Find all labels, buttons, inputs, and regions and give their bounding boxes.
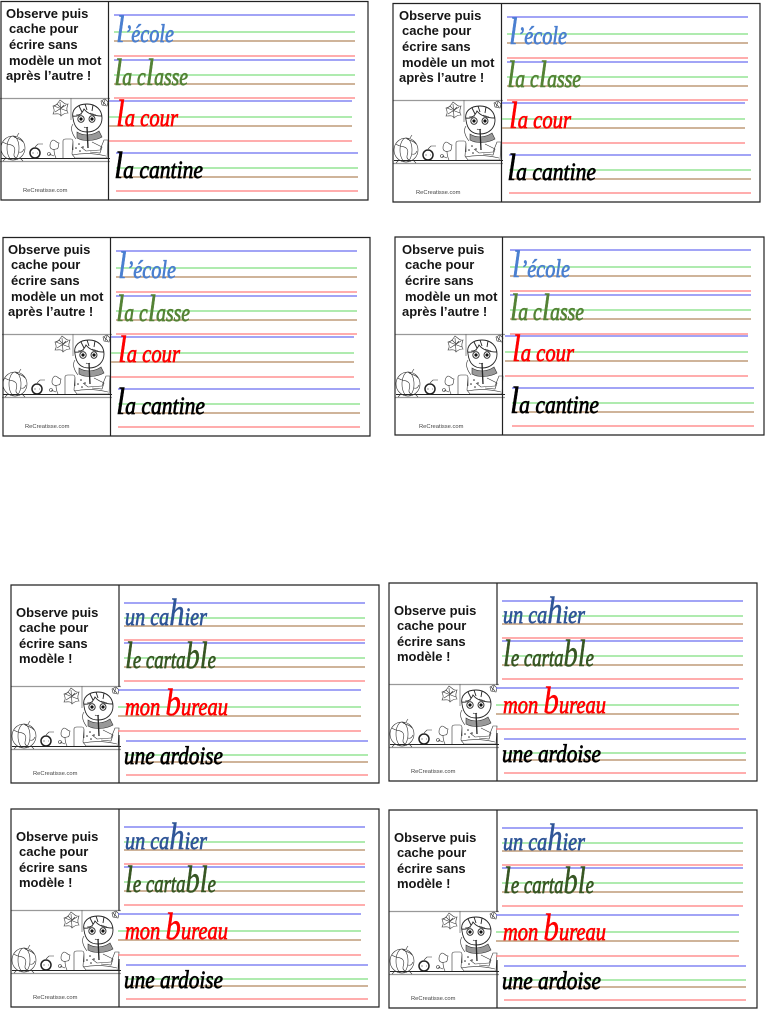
cursive words: un cahier [503, 817, 585, 859]
cursive words: mon bureau [503, 907, 606, 949]
cursive words [507, 11, 596, 189]
writing lines [109, 15, 358, 191]
cursive words: l’école [509, 11, 567, 53]
cursive words: la cantine [510, 380, 599, 422]
illustration: girl at desk [11, 686, 121, 750]
cursive words: la classe [510, 287, 584, 329]
card 6: un cahier [389, 583, 757, 781]
cursive words: la classe [116, 288, 190, 330]
cursive words: la cour [118, 329, 180, 371]
instructions: après l’autre ! [399, 70, 484, 85]
website credit: ReCreatisse.com [23, 188, 68, 194]
instructions: écrire sans [11, 273, 80, 288]
cursive words [124, 816, 228, 994]
card frame [11, 809, 379, 1007]
cursive words: la cantine [114, 145, 203, 187]
cursive words: la classe [114, 52, 188, 94]
card 5: un cahier [11, 585, 379, 783]
card 4: l'école [395, 237, 764, 435]
instructions: modèle un mot [402, 55, 495, 70]
cursive words: le cartable [503, 860, 594, 902]
card 8: un cahier [389, 810, 757, 1008]
card frame [1, 2, 368, 200]
instructions: écrire sans [397, 861, 466, 876]
instructions: après l’autre ! [6, 68, 91, 83]
card frame [395, 237, 764, 435]
cursive words: un cahier [125, 816, 207, 858]
card 2: l'école [393, 4, 760, 202]
cursive words: le cartable [503, 633, 594, 675]
cursive words: la cour [116, 93, 178, 135]
cursive words: une ardoise [124, 743, 223, 770]
writing lines [111, 251, 360, 427]
instructions: cache pour [397, 845, 466, 860]
card frame [389, 583, 757, 781]
instructions [394, 603, 476, 664]
cursive words: mon bureau [125, 906, 228, 948]
instructions [16, 829, 98, 890]
cursive words: un cahier [503, 590, 585, 632]
instructions: cache pour [19, 620, 88, 635]
cursive words: la cantine [507, 147, 596, 189]
cursive words: l’école [116, 9, 174, 51]
card frame [11, 585, 379, 783]
card 7: un cahier [11, 809, 379, 1007]
writing lines [502, 17, 751, 193]
cursive words: l’école [118, 245, 176, 287]
instructions: modèle ! [397, 649, 450, 664]
cursive words [502, 817, 606, 995]
cursive words: le cartable [125, 859, 216, 901]
website credit: ReCreatisse.com [419, 424, 464, 430]
card frame [389, 810, 757, 1008]
illustration: girl at desk [11, 910, 121, 974]
cursive words [502, 590, 606, 768]
illustration: girl at desk [2, 334, 112, 398]
writing lines [118, 827, 368, 999]
cursive words: une ardoise [502, 968, 601, 995]
website credit: ReCreatisse.com [33, 771, 78, 777]
instructions: modèle un mot [405, 289, 498, 304]
instructions: modèle ! [397, 876, 450, 891]
instructions: après l’autre ! [8, 304, 93, 319]
instructions: Observe puis [399, 8, 481, 23]
writing lines [118, 603, 368, 775]
instructions: Observe puis [394, 830, 476, 845]
website credit: ReCreatisse.com [411, 769, 456, 775]
instructions [6, 6, 102, 83]
instructions: Observe puis [394, 603, 476, 618]
instructions: cache pour [11, 257, 80, 272]
instructions: Observe puis [402, 242, 484, 257]
illustration: girl at desk [389, 684, 499, 748]
instructions: Observe puis [16, 605, 98, 620]
instructions: écrire sans [19, 636, 88, 651]
instructions: cache pour [402, 23, 471, 38]
instructions [402, 242, 498, 319]
instructions: écrire sans [405, 273, 474, 288]
cursive words [124, 592, 228, 770]
cursive words: la cantine [116, 381, 205, 423]
website credit: ReCreatisse.com [25, 424, 70, 430]
card frame [393, 4, 760, 202]
website credit: ReCreatisse.com [33, 995, 78, 1001]
cursive words [116, 245, 205, 423]
instructions [394, 830, 476, 891]
cursive words: la cour [509, 95, 571, 137]
instructions: écrire sans [397, 634, 466, 649]
instructions: modèle un mot [11, 289, 104, 304]
cursive words [510, 244, 599, 422]
cursive words: un cahier [125, 592, 207, 634]
cursive words: mon bureau [125, 682, 228, 724]
illustration: girl at desk [395, 334, 505, 398]
instructions: modèle ! [19, 651, 72, 666]
illustration: girl at desk [393, 100, 503, 164]
cursive words: une ardoise [124, 967, 223, 994]
card 3: l'école [2, 238, 370, 436]
instructions [399, 8, 495, 85]
writing lines [496, 601, 746, 773]
instructions: modèle un mot [9, 53, 102, 68]
instructions: Observe puis [6, 6, 88, 21]
instructions: cache pour [9, 21, 78, 36]
instructions: Observe puis [8, 242, 90, 257]
instructions: écrire sans [9, 37, 78, 52]
cursive words: le cartable [125, 635, 216, 677]
instructions: après l’autre ! [402, 304, 487, 319]
instructions: modèle ! [19, 875, 72, 890]
instructions: Observe puis [16, 829, 98, 844]
writing lines [505, 250, 754, 426]
instructions: cache pour [397, 618, 466, 633]
instructions: cache pour [19, 844, 88, 859]
writing lines [496, 828, 746, 1000]
cursive words: une ardoise [502, 741, 601, 768]
instructions [16, 605, 98, 666]
card frame [3, 238, 370, 436]
cursive words: mon bureau [503, 680, 606, 722]
instructions: écrire sans [19, 860, 88, 875]
cursive words: la cour [512, 328, 574, 370]
instructions: cache pour [405, 257, 474, 272]
cursive words: l’école [512, 244, 570, 286]
cursive words [114, 9, 203, 187]
website credit: ReCreatisse.com [416, 190, 461, 196]
illustration: girl at desk [389, 911, 499, 975]
instructions: écrire sans [402, 39, 471, 54]
cursive words: la classe [507, 54, 581, 96]
card 1: l'école [0, 2, 368, 200]
website credit: ReCreatisse.com [411, 996, 456, 1002]
instructions [8, 242, 104, 319]
illustration: girl at desk [0, 98, 110, 162]
